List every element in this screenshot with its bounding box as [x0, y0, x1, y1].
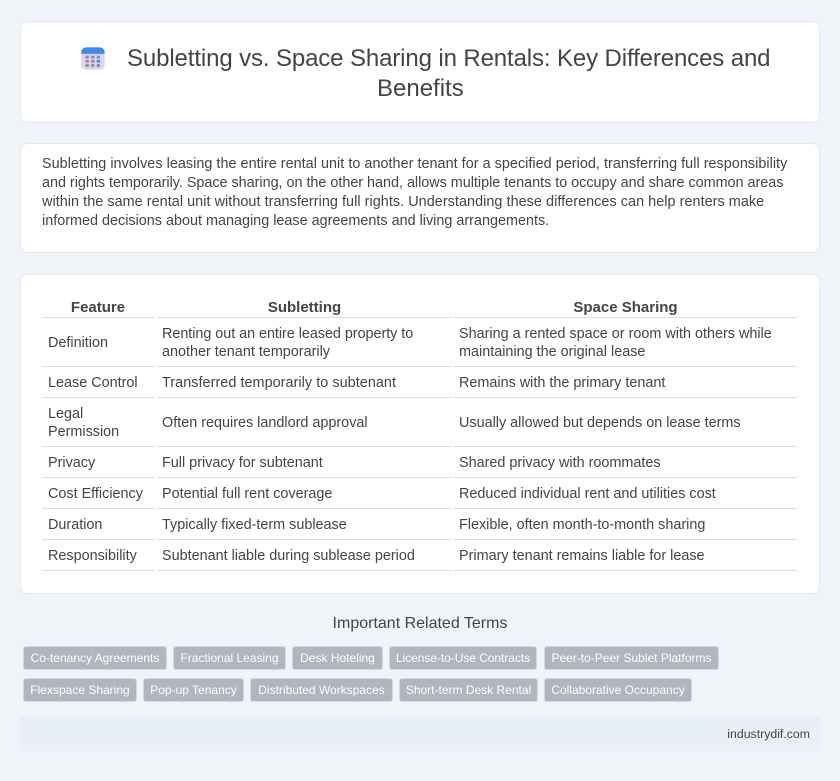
- tag: [389, 646, 537, 670]
- tag: [23, 678, 137, 702]
- row: duration: Duration: [48, 517, 102, 533]
- tag: [23, 646, 167, 670]
- row: definition: Sharing a rented space or room with others while: [459, 326, 772, 342]
- row: cost efficiency: Cost Efficiency: [48, 486, 143, 502]
- text block: introduction: [42, 156, 788, 229]
- row: lease control: Remains with the primary tenant: [459, 375, 665, 391]
- row: responsibility: [48, 548, 705, 564]
- tag: [292, 646, 383, 670]
- title: [127, 45, 770, 102]
- row: legal permission: [48, 406, 741, 440]
- row: legal permission: Legal: [48, 406, 83, 422]
- row: cost efficiency: [48, 486, 716, 502]
- row: lease control: Transferred temporarily to subtenant: [162, 375, 396, 391]
- tag: Fractional Leasing: [180, 651, 279, 665]
- title: Subletting vs. Space Sharing in Rentals: Key Differences and: [127, 45, 770, 72]
- tag: Desk Hoteling: [300, 651, 375, 665]
- row: cost efficiency: Reduced individual rent and utilities cost: [459, 486, 716, 502]
- row: duration: [48, 517, 705, 533]
- tag: [173, 646, 286, 670]
- panel: introduction: [20, 143, 820, 253]
- table header row: Subletting: [268, 299, 341, 316]
- tag: Distributed Workspaces: [258, 683, 385, 697]
- footer bar: [20, 717, 820, 751]
- text block: introduction: informed decisions about managing lease agreements and living arrangements.: [42, 213, 549, 229]
- row: definition: maintaining the original lease: [459, 344, 645, 360]
- row: lease control: Lease Control: [48, 375, 138, 391]
- tag list: [23, 646, 719, 702]
- title: Benefits: [377, 75, 464, 102]
- tag: License-to-Use Contracts: [396, 651, 530, 665]
- row: duration: Typically fixed-term sublease: [162, 517, 347, 533]
- row: responsibility: Primary tenant remains liable for lease: [459, 548, 705, 564]
- heading: important related terms: Important Related Terms: [333, 615, 507, 632]
- row: definition: another tenant temporarily: [162, 344, 330, 360]
- row: responsibility: Subtenant liable during sublease period: [162, 548, 415, 564]
- icon: calendar: [81, 47, 105, 70]
- row: definition: [48, 326, 772, 360]
- row: privacy: Full privacy for subtenant: [162, 455, 323, 471]
- tag: Pop-up Tenancy: [150, 683, 237, 697]
- tag: Flexspace Sharing: [30, 683, 130, 697]
- panel: comparison table: [20, 274, 820, 594]
- tag: [544, 646, 719, 670]
- row: cost efficiency: Potential full rent coverage: [162, 486, 332, 502]
- tag: Peer-to-Peer Sublet Platforms: [551, 651, 712, 665]
- tag: [250, 678, 393, 702]
- row: legal permission: Usually allowed but depends on lease terms: [459, 415, 741, 431]
- text block: introduction: and rights temporarily. Space sharing, on the other hand, allows multiple tenants to occupy and share common areas: [42, 175, 783, 191]
- panel: header: [20, 21, 820, 123]
- table header row: Space Sharing: [573, 299, 678, 316]
- tag: Co-tenancy Agreements: [31, 651, 159, 665]
- row: duration: Flexible, often month-to-month sharing: [459, 517, 705, 533]
- table header row: Feature: [71, 299, 125, 316]
- text block: introduction: Subletting involves leasing the entire rental unit to another tenant for a specified period, transferring full responsibility: [42, 156, 787, 172]
- text block: introduction: within the same rental unit without transferring full rights. Understanding these differences can help renters make: [42, 194, 764, 210]
- tag: [143, 678, 244, 702]
- row: privacy: [48, 455, 661, 471]
- tag: Short-term Desk Rental: [406, 683, 531, 697]
- row: definition: Renting out an entire leased property to: [162, 326, 413, 342]
- row: privacy: Shared privacy with roommates: [459, 455, 661, 471]
- tag: Collaborative Occupancy: [551, 683, 685, 697]
- row: responsibility: Responsibility: [48, 548, 137, 564]
- row: privacy: Privacy: [48, 455, 95, 471]
- row: legal permission: Permission: [48, 424, 119, 440]
- tag: [399, 678, 538, 702]
- comparison table: [42, 299, 797, 571]
- table header row: [71, 299, 678, 316]
- row: lease control: [48, 375, 666, 391]
- row: legal permission: Often requires landlord approval: [162, 415, 368, 431]
- footer source text: industrydif.com: [727, 727, 810, 741]
- row: definition: Definition: [48, 335, 108, 351]
- tag: [544, 678, 692, 702]
